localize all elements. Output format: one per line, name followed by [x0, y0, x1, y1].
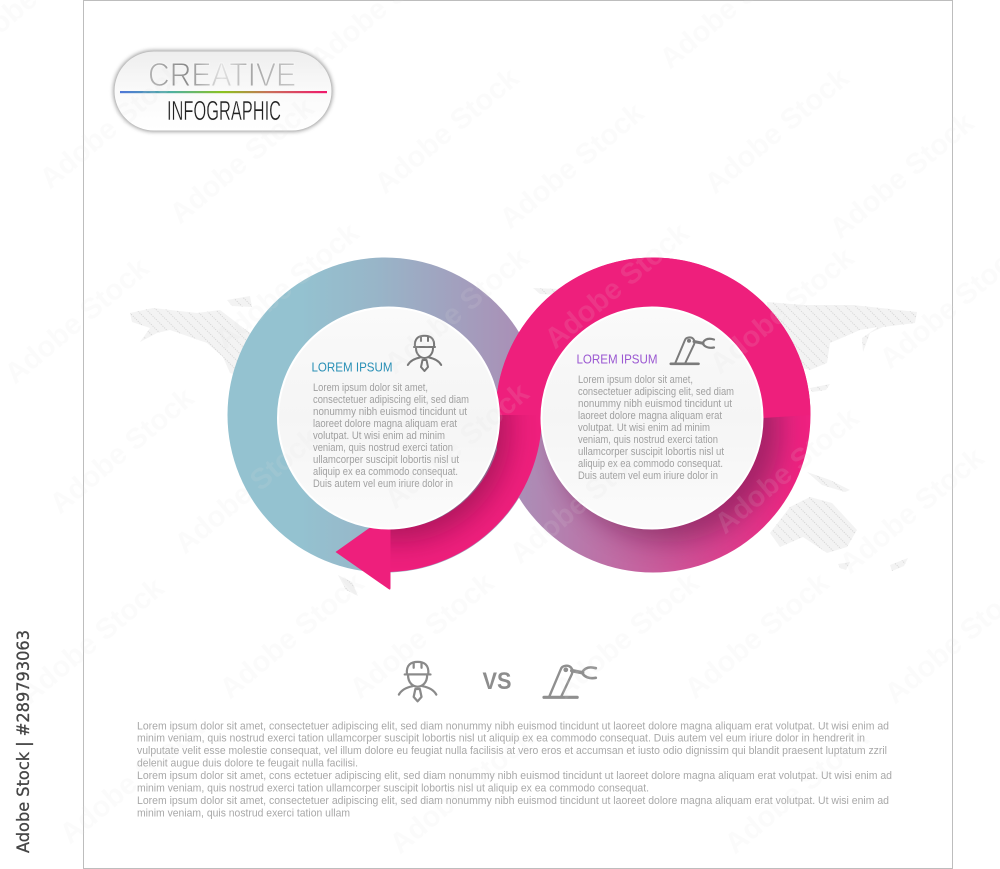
watermark overlay: Adobe Stock [0, 251, 156, 390]
text block: left: veniam, quis nostrud exerci tation [313, 442, 453, 454]
watermark overlay: Adobe Stock [504, 431, 661, 570]
left ring [228, 258, 542, 572]
text block: right: Duis autem vel eum iriure dolor in [578, 470, 718, 482]
text block: footer paragraph [137, 720, 892, 820]
icon: worker in left circle [408, 336, 441, 371]
text block: right: aliquip ex ea commodo consequat. [578, 458, 723, 470]
watermark overlay: Adobe Stock [709, 401, 866, 540]
icon: worker [399, 662, 436, 701]
text block: left: nonummy nibh euismod tincidunt ut [313, 406, 467, 418]
ribbon shadow [390, 415, 523, 555]
watermark overlay: Adobe Stock [169, 421, 326, 560]
rainbow line [120, 91, 327, 93]
text block: right: consectetuer adipiscing elit, sed diam [578, 386, 734, 398]
text block: right: ullamcorper suscipit lobortis nisl ut [578, 446, 724, 458]
text block: footer paragraph: Lorem ipsum dolor sit amet, cons ectetuer adipiscing elit, sed diam nonummy nibh euismod tincidunt ut laoreet dolore magna aliquam erat volutpat. Ut wisi enim ad [137, 770, 892, 782]
badge pill [114, 52, 332, 130]
watermark overlay: Adobe Stock [379, 376, 536, 515]
text block: footer paragraph: Lorem ipsum dolor sit amet, consectetuer adipiscing elit, sed diam nonummy nibh euismod tincidunt ut laoreet dolore magna aliquam erat volutpat. Ut wisi enim ad [137, 795, 889, 807]
text block: left: consectetuer adipiscing elit, sed diam [313, 394, 469, 406]
watermark overlay: Adobe Stock [214, 566, 371, 705]
logo word: infographic: INFOGRAPHIC [167, 95, 281, 126]
pink ribbon [390, 258, 810, 572]
text block: footer paragraph: minim veniam, quis nostrud exerci tation ullamcorper suscipit lobortis nisl ut aliquip ex ea commodo consequat. Duis autem vel eum iriure dolor in hendrerit in [137, 732, 865, 744]
text block: left: volutpat. Ut wisi enim ad minim [313, 430, 445, 442]
stock id side label: Adobe Stock | #289793063 [14, 630, 34, 853]
watermark overlay: Adobe Stock [384, 721, 541, 860]
world map background [130, 288, 917, 596]
watermark overlay: Adobe Stock [369, 61, 526, 200]
text block: left [313, 382, 469, 490]
heading: left: LOREM IPSUM [312, 360, 392, 374]
text block: footer paragraph: minim veniam, quis nostrud exerci tation ullamcorper suscipit lobortis nisl ut aliquip ex ea commodo consequat. [137, 782, 649, 794]
text block: footer paragraph: minim veniam, quis nostrud exerci tation ullam [137, 808, 350, 820]
watermark overlay: Adobe Stock [34, 56, 191, 195]
logo badge [114, 50, 332, 132]
right ring lower half [496, 415, 810, 572]
watermark overlay: Adobe Stock [719, 721, 876, 860]
text block: right: Lorem ipsum dolor sit amet, [578, 374, 693, 386]
watermark overlay: Adobe Stock [539, 216, 696, 355]
arrow head [336, 514, 390, 590]
watermark overlay: Adobe Stock [14, 571, 171, 710]
icon: robot arm in right circle [671, 337, 714, 364]
watermark overlay: Adobe Stock [344, 566, 501, 705]
heading: right: LOREM IPSUM [576, 352, 658, 366]
watermark overlay: Adobe Stock [209, 216, 366, 355]
watermark overlay: Adobe Stock [704, 241, 861, 380]
panel: right circle text [576, 352, 734, 482]
text block: right: veniam, quis nostrud exerci tation [578, 434, 718, 446]
watermark overlay: Adobe Stock [679, 566, 836, 705]
watermark overlay: Adobe Stock [549, 566, 706, 705]
watermark overlay: Adobe Stock [379, 241, 536, 380]
right text disc [542, 308, 762, 528]
ribbon top cover [496, 258, 810, 415]
text block: left: laoreet dolore magna aliquam erat [313, 418, 457, 430]
text block: left: Lorem ipsum dolor sit amet, [313, 382, 428, 394]
text block: footer paragraph: delenit augue duis dolore te feugait nulla facilisi. [137, 758, 358, 770]
watermark overlay: Adobe Stock [494, 96, 651, 235]
text block: right: nonummy nibh euismod tincidunt ut [578, 398, 732, 410]
icon: robot arm [544, 666, 596, 697]
text block: footer paragraph: vulputate velit esse molestie consequat, vel illum dolore eu feugiat nulla facilisis at vero eros et accumsan et iusto odio dignissim qui blandit praesent luptatum zzril [137, 745, 887, 757]
badge shadow [114, 50, 332, 132]
text block: right: volutpat. Ut wisi enim ad minim [578, 422, 710, 434]
watermark overlay: Adobe Stock [824, 106, 981, 245]
watermark overlay: Adobe Stock [54, 711, 211, 850]
infinity ribbon graphic [228, 258, 810, 590]
watermark overlay: Adobe Stock [834, 441, 991, 580]
text block: right: laoreet dolore magna aliquam erat [578, 410, 722, 422]
vs label: VS [482, 668, 512, 695]
logo word: creative: CREATIVE [148, 56, 296, 93]
right ring shadow [544, 416, 794, 554]
watermark overlay: Adobe Stock [699, 61, 856, 200]
text block: footer paragraph: Lorem ipsum dolor sit amet, consectetuer adipiscing elit, sed diam nonummy nibh euismod tincidunt ut laoreet dolore magna aliquam erat volutpat. Ut wisi enim ad [137, 720, 889, 732]
text block: left: aliquip ex ea commodo consequat. [313, 466, 458, 478]
text block: left: ullamcorper suscipit lobortis nisl ut [313, 454, 459, 466]
text block: right [578, 374, 734, 482]
watermark overlay: Adobe Stock [44, 381, 201, 520]
watermark overlay: Adobe Stock [164, 91, 321, 230]
left text disc [278, 308, 499, 528]
comparison row [399, 662, 596, 701]
panel: left circle text [312, 360, 469, 490]
text block: left: Duis autem vel eum iriure dolor in [313, 478, 453, 490]
